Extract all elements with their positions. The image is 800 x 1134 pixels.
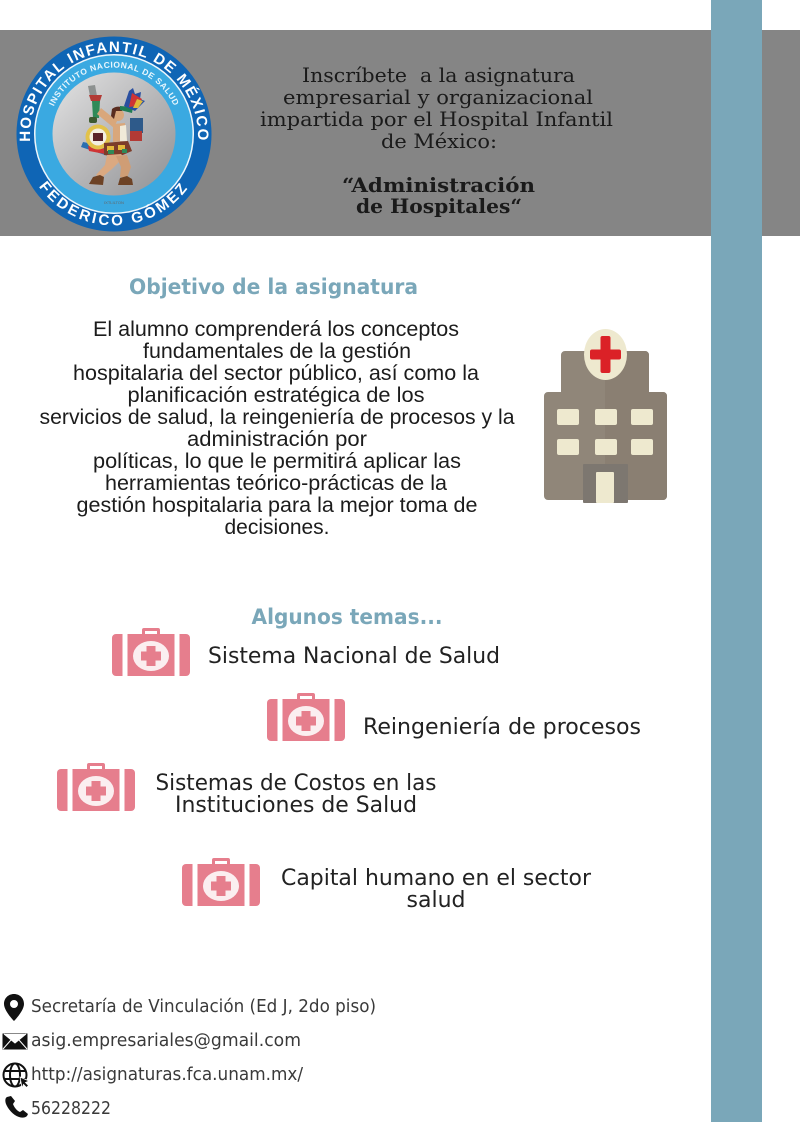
contact: website: http://asignaturas.fca.unam.mx/	[31, 1065, 303, 1085]
heading text: invitation: impartida por el Hospital Infantil	[260, 107, 613, 131]
contact: address: Secretaría de Vinculación (Ed J, 2do piso)	[31, 997, 376, 1017]
heading: algunos temas: Algunos temas...	[252, 605, 442, 629]
icon: envelope	[2, 1033, 28, 1050]
icon: aztec figure	[81, 85, 145, 185]
topic: Capital humano	[182, 858, 592, 913]
contact: email: asig.empresariales@gmail.com	[31, 1031, 301, 1051]
icon: medical kit	[57, 763, 135, 811]
text block: objective	[40, 317, 515, 539]
topic: Reingeniería de procesos: Reingeniería de procesos	[363, 715, 641, 740]
contact: address	[4, 994, 376, 1021]
text block: objective: El alumno comprenderá los conceptos	[93, 317, 459, 341]
heading text: invitation: empresarial y organizacional	[283, 85, 593, 109]
contact: phone	[5, 1096, 111, 1119]
text block: objective: administración por	[187, 427, 367, 451]
text block: objective: gestión hospitalaria para la mejor toma de	[76, 493, 478, 517]
topic: Capital humano: Capital humano en el sector	[281, 866, 592, 891]
text block: objective: servicios de salud, la reingeniería de procesos y la	[40, 405, 515, 429]
logo: Hospital Infantil de México: FEDERICO GÓMEZ	[39, 180, 188, 226]
topic: Capital humano: salud	[406, 888, 466, 913]
topic: Sistemas de Costos: Sistemas de Costos en las	[156, 771, 436, 796]
icon: medical kit	[112, 628, 190, 676]
icon: globe with cursor	[4, 1064, 26, 1086]
heading: objetivo: Objetivo de la asignatura	[129, 275, 418, 299]
icon: telephone	[5, 1096, 28, 1118]
heading text: invitation: Inscríbete a la asignatura	[302, 63, 575, 87]
title: course name: de Hospitales“	[356, 194, 522, 218]
text block: objective: hospitalaria del sector público, así como la	[73, 361, 479, 385]
heading text: invitation: de México:	[381, 129, 497, 153]
title: course name	[342, 173, 535, 218]
topic: Sistema Nacional de Salud	[112, 628, 500, 676]
heading text: invitation	[260, 63, 613, 153]
topic: Sistema Nacional de Salud: Sistema Nacional de Salud	[208, 644, 500, 669]
icon: hospital building	[544, 329, 667, 503]
topic: Reingeniería de procesos	[267, 693, 641, 741]
text block: objective: decisiones.	[224, 515, 330, 539]
contact: phone: 56228222	[31, 1099, 111, 1119]
icon: medical kit	[267, 693, 345, 741]
logo: Hospital Infantil de México: IXTLILTON	[104, 200, 124, 205]
title: course name: “Administración	[342, 173, 535, 197]
header band	[0, 30, 800, 236]
topic: Sistemas de Costos	[57, 763, 436, 818]
text block: objective: fundamentales de la gestión	[143, 339, 411, 363]
text block: objective: políticas, lo que le permitirá aplicar las	[93, 449, 461, 473]
text block: objective: planificación estratégica de los	[128, 383, 424, 407]
logo: Hospital Infantil de México	[16, 36, 212, 232]
icon: map pin	[4, 994, 24, 1021]
right vertical stripe	[711, 0, 762, 1122]
topic: Sistemas de Costos: Instituciones de Salud	[175, 793, 417, 818]
icon: medical kit	[182, 858, 260, 906]
logo: Hospital Infantil de México: INSTITUTO NACIONAL DE SALUD	[48, 62, 178, 106]
text block: objective: herramientas teórico-prácticas de la	[105, 471, 447, 495]
logo: Hospital Infantil de México: HOSPITAL INFANTIL DE MÉXICO	[20, 42, 208, 141]
